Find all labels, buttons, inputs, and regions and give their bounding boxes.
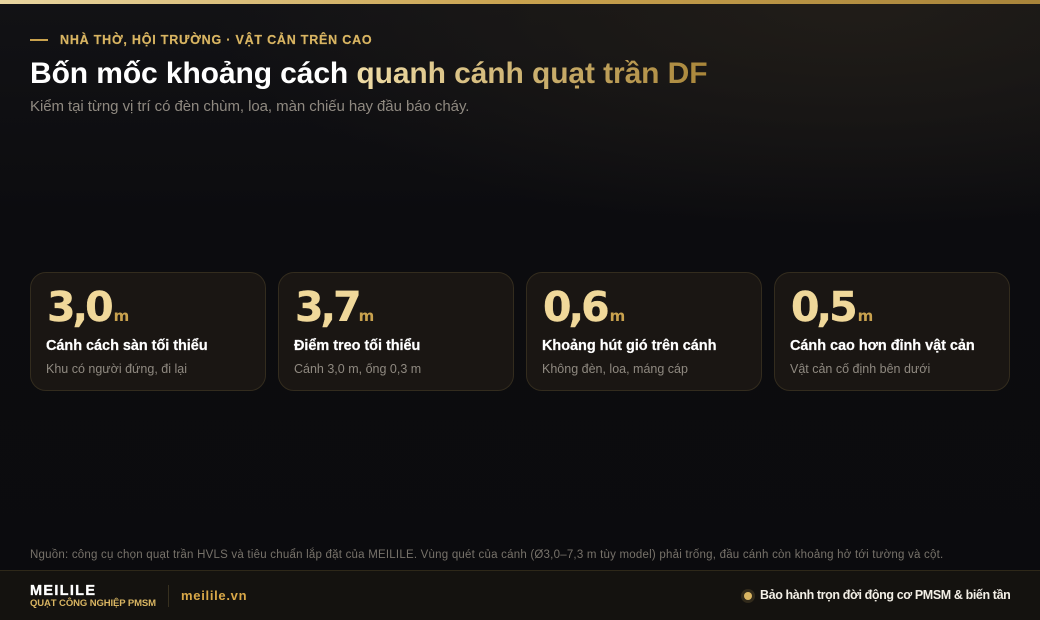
note: Không đèn, loa, máng cáp bbox=[542, 362, 688, 376]
card: 0,6 m bbox=[526, 272, 762, 391]
source note: Nguồn: công cụ chọn quạt trần HVLS và tiêu chuẩn lắp đặt của MEILILE. Vùng quét của cánh (Ø3,0–7,3 m tùy model) phải trống, đầu cánh còn khoảng hở tới tường và cột. bbox=[30, 549, 943, 561]
card: 3,0 m bbox=[30, 272, 266, 391]
card: 0,5 m bbox=[774, 272, 1010, 391]
brand tagline: QUẠT CÔNG NGHIỆP PMSM bbox=[30, 598, 156, 609]
website: meilile.vn bbox=[181, 588, 247, 603]
value: 0,5m bbox=[791, 283, 873, 331]
title: Bốn mốc khoảng cách quanh cánh quạt trần DF bbox=[30, 57, 707, 90]
value: 3,0m bbox=[47, 283, 129, 331]
label: Cánh cao hơn đỉnh vật cản bbox=[790, 338, 975, 354]
top gold bar bbox=[0, 0, 1040, 4]
note: Vật cản cố định bên dưới bbox=[790, 362, 930, 376]
value: 3,7m bbox=[295, 283, 374, 331]
value: 0,6m bbox=[543, 283, 625, 331]
subtitle: Kiểm tại từng vị trí có đèn chùm, loa, màn chiếu hay đầu báo cháy. bbox=[30, 98, 469, 115]
note: Cánh 3,0 m, ống 0,3 m bbox=[294, 362, 421, 376]
warranty dot bbox=[744, 592, 752, 600]
label: Cánh cách sàn tối thiểu bbox=[46, 338, 208, 354]
card: 3,7 m bbox=[278, 272, 514, 391]
stat cards row bbox=[30, 272, 1010, 391]
footer bar bbox=[0, 570, 1040, 620]
brand name: MEILILE bbox=[30, 583, 96, 599]
divider bbox=[168, 585, 169, 607]
eyebrow text: NHÀ THỜ, HỘI TRƯỜNG · VẬT CẢN TRÊN CAO bbox=[60, 33, 372, 47]
label: Điểm treo tối thiểu bbox=[294, 338, 420, 354]
warranty text: Bảo hành trọn đời động cơ PMSM & biến tần bbox=[760, 588, 1010, 602]
label: Khoảng hút gió trên cánh bbox=[542, 338, 716, 354]
header block bbox=[30, 32, 707, 115]
note: Khu có người đứng, đi lại bbox=[46, 362, 187, 376]
eyebrow dash bbox=[30, 39, 48, 41]
